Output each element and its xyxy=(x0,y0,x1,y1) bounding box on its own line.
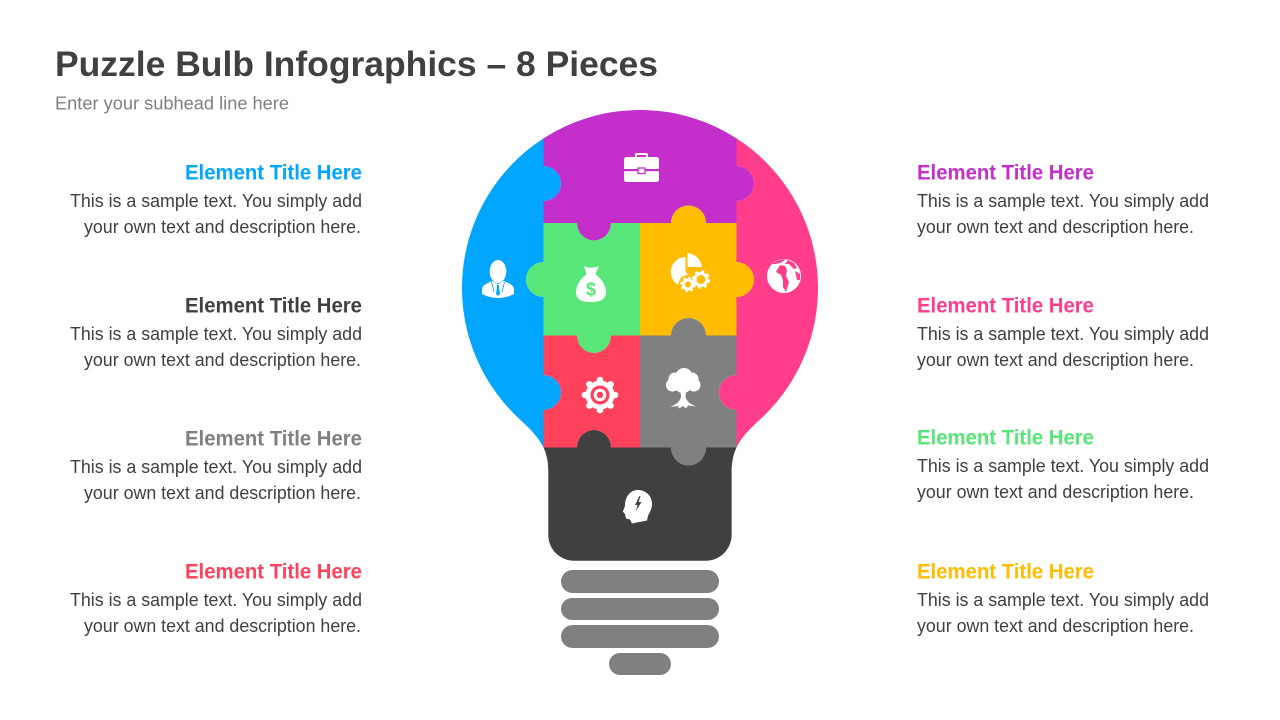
icon: businessman xyxy=(482,260,514,298)
text block: left 4 red: your own text and description here. xyxy=(84,616,361,636)
icon: target gear xyxy=(582,377,618,413)
icon: briefcase xyxy=(624,154,659,182)
text block: right 4 yellow xyxy=(917,560,1209,636)
text block: right 4 yellow: Element Title Here xyxy=(917,560,1094,584)
text block: right 1 purple: Element Title Here xyxy=(917,162,1094,184)
title: Puzzle Bulb Infographics – 8 Pieces xyxy=(55,45,658,84)
icon: tree xyxy=(666,368,700,408)
text block: left 4 red xyxy=(70,560,362,636)
text block: left 1 blue: This is a sample text. You simply add xyxy=(70,191,362,211)
piece: dark base xyxy=(544,430,736,561)
text block: right 1 purple xyxy=(917,162,1209,237)
text block: left 3 gray: Element Title Here xyxy=(185,428,362,450)
subhead: Enter your subhead line here xyxy=(55,92,289,114)
icon: money bag xyxy=(576,266,606,302)
text block: right 3 green: your own text and description here. xyxy=(917,482,1194,502)
piece: gray xyxy=(640,318,736,466)
text block: right 1 purple: This is a sample text. You simply add xyxy=(917,191,1209,211)
text block: right 3 green: Element Title Here xyxy=(917,426,1094,450)
text block: right 2 pink: Element Title Here xyxy=(917,294,1094,318)
piece: red xyxy=(544,336,640,448)
text block: left 1 blue xyxy=(70,162,362,237)
text block: left 3 gray xyxy=(70,428,362,503)
text block: right 3 green: This is a sample text. You simply add xyxy=(917,456,1209,476)
text block: left 3 gray: This is a sample text. You simply add xyxy=(70,457,362,477)
text block: right 4 yellow: This is a sample text. You simply add xyxy=(917,590,1209,610)
icon: pie chart with gears xyxy=(671,253,712,294)
text block: right 2 pink: your own text and description here. xyxy=(917,350,1194,370)
text block: right 1 purple: your own text and description here. xyxy=(917,217,1194,237)
piece: purple xyxy=(544,110,754,240)
screw base xyxy=(561,570,719,675)
piece: yellow xyxy=(640,206,754,336)
icon: globe xyxy=(767,259,801,293)
text block: left 3 gray: your own text and description here. xyxy=(84,483,361,503)
text block: left 1 blue: Element Title Here xyxy=(185,162,362,184)
text block: left 4 red: This is a sample text. You simply add xyxy=(70,590,362,610)
piece: pink xyxy=(719,138,818,448)
piece: green xyxy=(526,223,640,353)
text block: left 2 dark: This is a sample text. You simply add xyxy=(70,324,362,344)
text block: right 3 green xyxy=(917,426,1209,502)
puzzle bulb xyxy=(462,110,818,561)
text block: left 2 dark: Element Title Here xyxy=(185,294,362,318)
text block: right 2 pink xyxy=(917,294,1209,370)
text block: left 4 red: Element Title Here xyxy=(185,560,362,584)
text block: right 4 yellow: your own text and description here. xyxy=(917,616,1194,636)
text block: left 2 dark xyxy=(70,294,362,370)
icon: money bag: $ xyxy=(586,280,596,300)
icon: head with bolt xyxy=(623,490,652,524)
text block: left 2 dark: your own text and description here. xyxy=(84,350,361,370)
text block: right 2 pink: This is a sample text. You simply add xyxy=(917,324,1209,344)
piece: blue xyxy=(462,138,561,448)
text block: left 1 blue: your own text and description here. xyxy=(84,217,361,237)
